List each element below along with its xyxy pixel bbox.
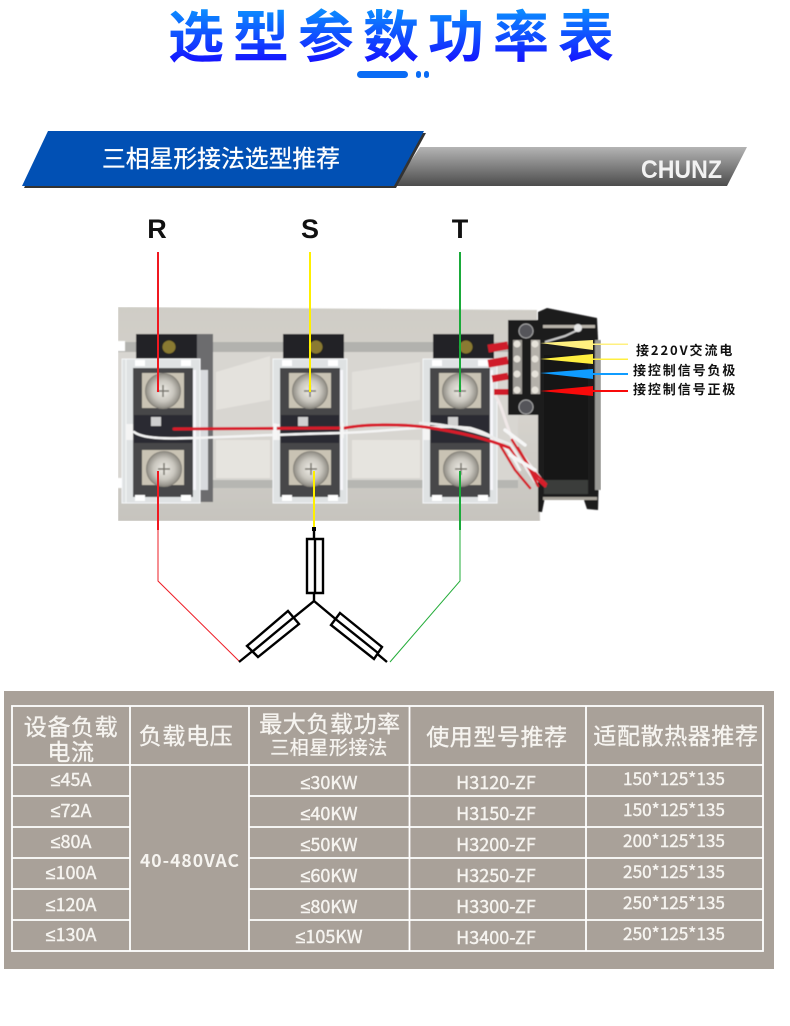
phase wire S — [310, 252, 316, 531]
column: model: H3120-ZF — [456, 769, 536, 795]
brand logo: CHUNZ — [641, 156, 722, 184]
column: model: H3200-ZF — [456, 831, 536, 857]
phase wire T — [390, 252, 460, 662]
phase labels R S T: T — [452, 214, 469, 244]
wiring pointers — [540, 340, 628, 396]
photo: solid state relays on heat sink with fan — [118, 307, 601, 521]
column: load current: ≤120A — [46, 891, 96, 917]
column: heat sink: 150*125*135 — [623, 765, 725, 790]
phase wire R — [158, 252, 240, 662]
column: heat sink: 250*125*135 — [623, 858, 725, 883]
column: heat sink — [623, 765, 725, 945]
column: max power: ≤40KW — [300, 800, 358, 826]
wiring labels: 接控制信号正极 — [633, 379, 737, 398]
title underline accent — [357, 71, 429, 78]
table header: 最大负载功率 — [259, 705, 401, 739]
column: load current: ≤100A — [46, 859, 96, 885]
table grid — [12, 706, 763, 951]
column: model: H3250-ZF — [456, 862, 536, 888]
column: model — [456, 769, 536, 950]
table header: 负载电压 — [139, 717, 233, 751]
parameter table panel — [4, 691, 774, 969]
wiring labels: 接控制信号负极 — [633, 360, 737, 379]
column: max power: ≤50KW — [300, 831, 358, 857]
wiring labels — [633, 340, 737, 398]
table header: 三相星形接法 — [270, 733, 388, 760]
star connection symbol — [239, 530, 387, 662]
table header: 设备负载 — [24, 708, 118, 742]
column: load current: ≤72A — [51, 797, 91, 823]
relay R — [122, 334, 213, 503]
column: load current: ≤45A — [51, 766, 91, 792]
column: model: H3150-ZF — [456, 800, 536, 826]
column: max power — [295, 769, 363, 949]
cooling fan — [538, 308, 601, 512]
column: max power: ≤105KW — [295, 923, 363, 949]
column: heat sink: 250*125*135 — [623, 920, 725, 945]
relay S — [273, 334, 347, 503]
column: heat sink: 150*125*135 — [623, 796, 725, 821]
phase labels R S T — [147, 214, 469, 244]
relay T — [423, 334, 497, 503]
table header: 使用型号推荐 — [426, 718, 568, 752]
phase labels R S T: S — [301, 214, 319, 244]
column: heat sink: 250*125*135 — [623, 889, 725, 914]
column: load current — [46, 766, 96, 947]
wiring labels: 接220V交流电 — [636, 340, 734, 359]
column: model: H3300-ZF — [456, 893, 536, 919]
column: max power: ≤60KW — [300, 862, 358, 888]
column: max power: ≤30KW — [300, 769, 358, 795]
column: load current: ≤80A — [51, 828, 91, 854]
column: heat sink: 200*125*135 — [623, 827, 725, 852]
column: max power: ≤80KW — [300, 893, 358, 919]
column: model: H3400-ZF — [456, 924, 536, 950]
table header: 电流 — [47, 733, 95, 767]
terminal block — [487, 320, 543, 415]
table header — [24, 705, 759, 767]
wiring harness — [134, 395, 546, 488]
column: load current: ≤130A — [46, 921, 96, 947]
phase labels R S T: R — [147, 214, 167, 244]
section banner — [22, 131, 747, 188]
banner heading: 三相星形接法选型推荐 — [102, 139, 340, 174]
column: load voltage: 40-480VAC — [140, 848, 240, 873]
table header: 适配散热器推荐 — [593, 717, 759, 751]
heat sink plate — [118, 307, 540, 521]
